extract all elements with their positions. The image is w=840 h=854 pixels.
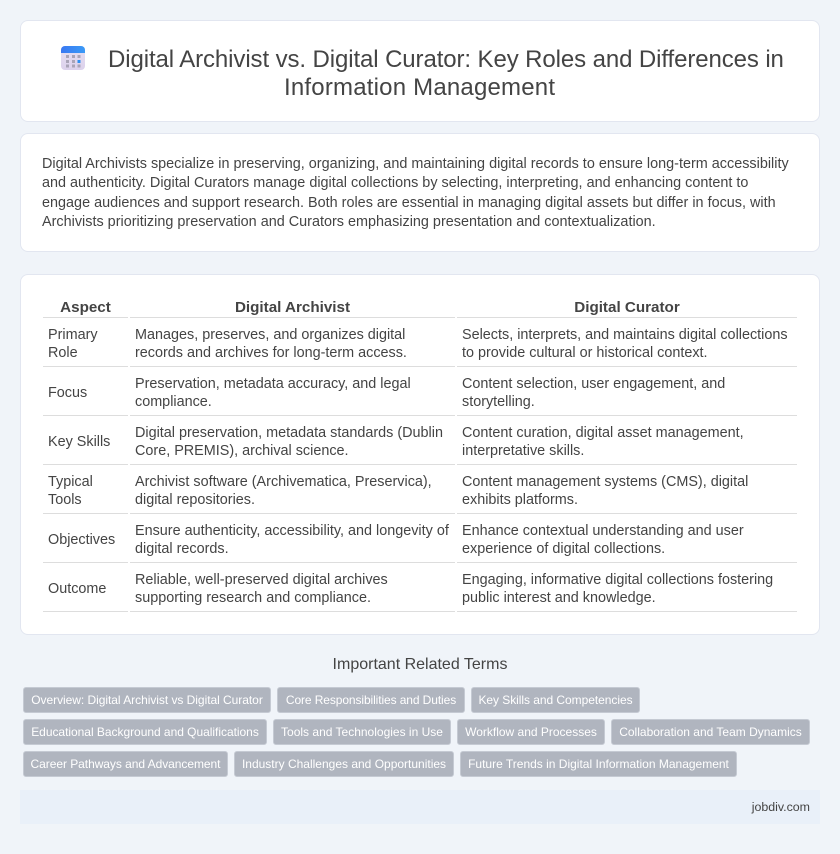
- panel: comparison table: Digital preservation, metadata standards (Dublin: [135, 425, 443, 441]
- related term tags: Career Pathways and Advancement: [31, 757, 220, 771]
- panel: comparison table: Content curation, digital asset management,: [462, 425, 744, 441]
- panel: comparison table: storytelling.: [462, 394, 535, 410]
- panel: comparison table: Archivist software (Archivematica, Preservica),: [135, 474, 432, 490]
- title: Information Management: [284, 74, 555, 101]
- panel: comparison table: Tools: [48, 492, 82, 508]
- panel: comparison table: public interest and knowledge.: [462, 590, 656, 606]
- panel: comparison table: Core, PREMIS), archival science.: [135, 443, 349, 459]
- panel: header: [20, 20, 820, 122]
- panel: comparison table: digital repositories.: [135, 492, 255, 508]
- panel: comparison table: Reliable, well-preserved digital archives: [135, 572, 388, 588]
- panel: comparison table: Objectives: [48, 532, 115, 548]
- related term tags: [23, 687, 810, 777]
- panel: comparison table: to provide cultural or historical context.: [462, 345, 708, 361]
- footer: [20, 790, 820, 824]
- related term tags: Workflow and Processes: [465, 725, 597, 739]
- footer source: jobdiv.com: [752, 800, 810, 814]
- panel: introduction: Archivists prioritizing preservation and Curators emphasizing presentation and contextualization.: [42, 214, 656, 230]
- panel: comparison table: Outcome: [48, 581, 106, 597]
- panel: comparison table: Role: [48, 345, 78, 361]
- panel: comparison table: Key Skills: [48, 434, 110, 450]
- title: [108, 46, 784, 101]
- related term tags: Industry Challenges and Opportunities: [242, 757, 446, 771]
- panel: comparison table: Ensure authenticity, accessibility, and longevity of: [135, 523, 449, 539]
- panel: comparison table: [20, 274, 820, 635]
- related term tags: Key Skills and Competencies: [478, 693, 633, 707]
- panel: introduction: engage audiences and support research. Both roles are essential in managing digital assets but differ in focus, with: [42, 195, 776, 211]
- panel: comparison table: Engaging, informative digital collections fostering: [462, 572, 773, 588]
- panel: introduction: Digital Archivists specialize in preserving, organizing, and maintaining digital records to ensure long-term accessibility: [42, 156, 789, 172]
- icon: calendar: [61, 46, 85, 70]
- related term tags: Tools and Technologies in Use: [281, 725, 443, 739]
- related term tags: Core Responsibilities and Duties: [286, 693, 456, 707]
- panel: introduction: [20, 133, 820, 252]
- panel: comparison table: records and archives for long-term access.: [135, 345, 407, 361]
- panel: comparison table: experience of digital collections.: [462, 541, 665, 557]
- panel: comparison table: Digital Archivist: [235, 299, 350, 316]
- panel: introduction: and authenticity. Digital Curators manage digital collections by selecting, interpreting, and enhancing content to: [42, 175, 748, 191]
- panel: comparison table: Primary: [48, 327, 98, 343]
- panel: comparison table: Content management systems (CMS), digital: [462, 474, 748, 490]
- panel: comparison table: Content selection, user engagement, and: [462, 376, 725, 392]
- panel: comparison table: digital records.: [135, 541, 229, 557]
- panel: comparison table: Preservation, metadata accuracy, and legal: [135, 376, 411, 392]
- panel: comparison table: supporting research and compliance.: [135, 590, 371, 606]
- title: Digital Archivist vs. Digital Curator: Key Roles and Differences in: [108, 46, 784, 73]
- panel: comparison table: exhibits platforms.: [462, 492, 578, 508]
- panel: comparison table: interpretative skills.: [462, 443, 584, 459]
- panel: comparison table: Enhance contextual understanding and user: [462, 523, 744, 539]
- related term tags: Overview: Digital Archivist vs Digital Curator: [31, 693, 263, 707]
- related term tags: Future Trends in Digital Information Management: [468, 757, 729, 771]
- related term tags: Educational Background and Qualifications: [31, 725, 259, 739]
- panel: comparison table: Typical: [48, 474, 93, 490]
- panel: comparison table: compliance.: [135, 394, 212, 410]
- panel: comparison table: Aspect: [60, 299, 111, 316]
- panel: comparison table: Digital Curator: [574, 299, 680, 316]
- panel: comparison table: Focus: [48, 385, 87, 401]
- panel: comparison table: Selects, interprets, and maintains digital collections: [462, 327, 788, 343]
- related term tags: Collaboration and Team Dynamics: [619, 725, 802, 739]
- panel: comparison table: Manages, preserves, and organizes digital: [135, 327, 405, 343]
- heading: related terms: Important Related Terms: [333, 656, 507, 673]
